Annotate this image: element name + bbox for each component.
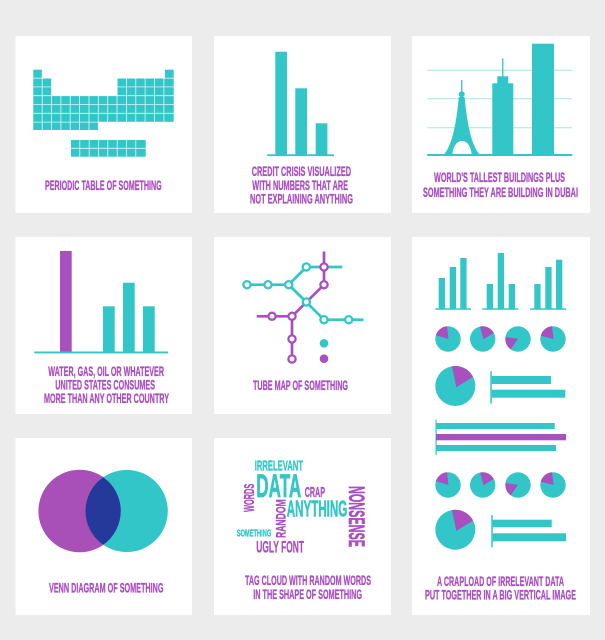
pie charts: row 1 bbox=[435, 326, 566, 352]
caption: tag cloud: TAG CLOUD WITH RANDOM WORDS bbox=[245, 572, 371, 588]
bar chart: wide horizontal bbox=[436, 420, 566, 455]
pie chart: large 2 bbox=[435, 510, 475, 550]
panel: periodic table bbox=[16, 36, 192, 213]
panel: tag cloud bbox=[214, 438, 391, 615]
caption: credit crisis: CREDIT CRISIS VISUALIZED bbox=[252, 163, 351, 179]
pie chart: large 1 bbox=[435, 366, 475, 406]
caption: tallest buildings bbox=[423, 169, 578, 200]
chart: tag cloud: CRAP bbox=[305, 485, 325, 501]
caption: tube map: TUBE MAP OF SOMETHING bbox=[253, 377, 348, 393]
caption: periodic table: PERIODIC TABLE OF SOMETHING bbox=[45, 177, 162, 193]
chart: tag cloud: SOMETHING bbox=[237, 528, 271, 539]
bar chart: group 1 bbox=[435, 258, 471, 310]
icon: dubai tower bbox=[532, 44, 554, 155]
panel: venn diagram bbox=[16, 438, 192, 615]
caption: vertical data collection bbox=[425, 573, 576, 602]
chart: tag cloud: DATA bbox=[256, 468, 301, 504]
chart: tag cloud: ANYTHING bbox=[287, 495, 347, 521]
caption: credit crisis: WITH NUMBERS THAT ARE bbox=[252, 177, 348, 193]
bar chart: credit crisis bbox=[267, 52, 334, 156]
bar chart: horizontal 2 bbox=[491, 515, 566, 547]
chart: tag cloud: WORDS bbox=[241, 484, 258, 512]
caption: tag cloud bbox=[245, 572, 371, 602]
caption: venn diagram: VENN DIAGRAM OF SOMETHING bbox=[49, 579, 164, 595]
chart: periodic table grid bbox=[33, 69, 174, 157]
chart: tag cloud bbox=[237, 458, 369, 556]
chart: tube map bbox=[243, 252, 364, 363]
chart: tag cloud: NONSENSE bbox=[344, 486, 369, 547]
panel: vertical data collection bbox=[412, 237, 590, 615]
panel: credit crisis bbox=[214, 36, 391, 213]
caption: consumption: UNITED STATES CONSUMES bbox=[55, 376, 155, 392]
icon: skyscraper bbox=[492, 58, 513, 155]
bar chart: group 2 bbox=[482, 253, 518, 310]
chart: tag cloud: UGLY FONT bbox=[256, 537, 304, 556]
caption: tag cloud: IN THE SHAPE OF SOMETHING bbox=[253, 586, 362, 602]
chart: buildings skyline bbox=[427, 44, 572, 156]
chart: tag cloud: IRRELEVANT bbox=[255, 458, 303, 474]
caption: credit crisis: NOT EXPLAINING ANYTHING bbox=[250, 190, 353, 206]
panel: tallest buildings bbox=[412, 36, 590, 213]
bar chart: consumption bbox=[34, 251, 168, 353]
panel: tube map bbox=[214, 237, 391, 414]
chart: venn diagram bbox=[38, 470, 168, 552]
bar chart: group 3 bbox=[530, 260, 566, 310]
chart: tag cloud: RANDOM bbox=[273, 499, 289, 538]
pie charts: row 2 bbox=[435, 472, 566, 498]
caption: consumption bbox=[44, 363, 169, 406]
bar chart: horizontal 1 bbox=[490, 371, 565, 404]
panel: consumption bars bbox=[16, 237, 192, 414]
caption: consumption: WATER, GAS, OIL OR WHATEVER bbox=[48, 363, 164, 379]
icon: eiffel tower bbox=[444, 80, 480, 155]
caption: credit crisis bbox=[250, 163, 353, 206]
caption: consumption: MORE THAN ANY OTHER COUNTRY bbox=[44, 390, 169, 406]
